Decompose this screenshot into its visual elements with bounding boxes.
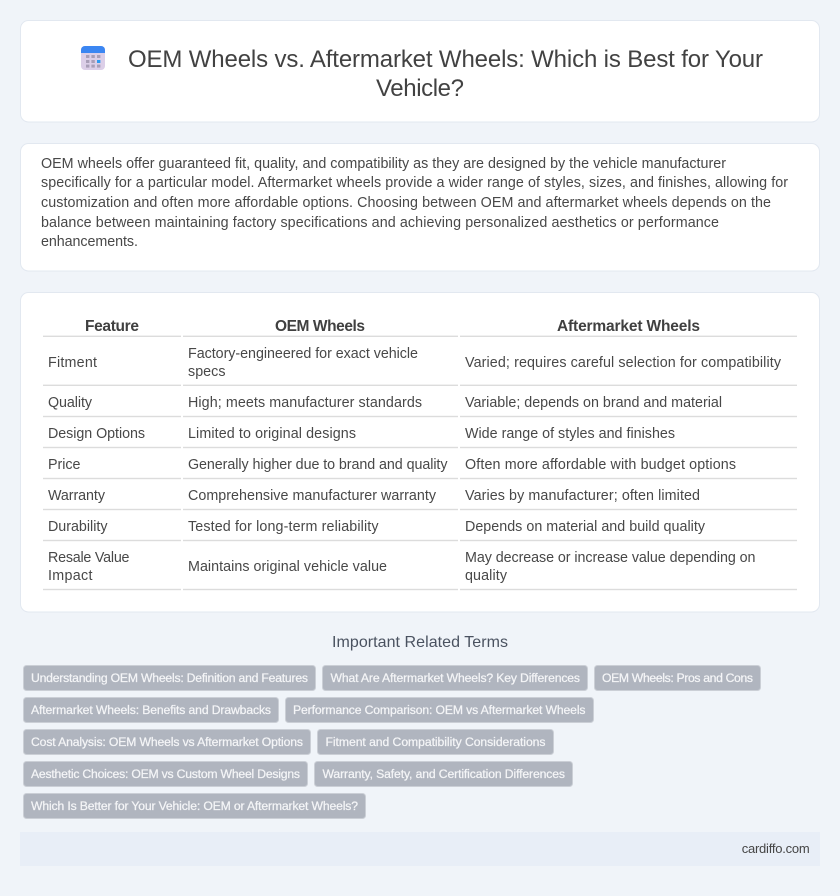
tag: Aesthetic Choices: OEM vs Custom Wheel Designs [31, 767, 300, 781]
tag [322, 666, 588, 690]
row: price: Price [48, 457, 81, 473]
row: warranty: Varies by manufacturer; often limited [465, 488, 700, 504]
row: durability: Depends on material and build quality [465, 519, 706, 535]
panel: introduction text: customization and often more affordable options. Choosing between OEM and aftermarket wheels depends on the [41, 195, 771, 211]
row: fitment: Factory-engineered for exact vehicle [188, 346, 418, 362]
row: design options [48, 426, 675, 442]
row: price: Generally higher due to brand and quality [188, 457, 448, 473]
row: design options: Limited to original designs [188, 426, 356, 442]
related terms tags [24, 666, 760, 818]
tag [314, 762, 572, 786]
tag: Performance Comparison: OEM vs Aftermarket Wheels [293, 703, 586, 717]
table header row: Feature [85, 318, 139, 335]
row: resale value impact: Impact [48, 568, 93, 584]
tag [594, 666, 760, 690]
panel: introduction text: specifically for a particular model. Aftermarket wheels provide a wider range of styles, sizes, and finishes, allowing for [41, 175, 788, 191]
table header row: Aftermarket Wheels [557, 318, 700, 335]
table header row: OEM Wheels [275, 318, 365, 335]
row: price [48, 457, 736, 473]
tag [318, 730, 554, 754]
row: fitment: Fitment [48, 355, 97, 371]
row: warranty [48, 488, 700, 504]
tag [24, 698, 278, 722]
tag [24, 666, 316, 690]
tag [286, 698, 594, 722]
panel: header [20, 20, 820, 122]
tag [24, 730, 310, 754]
row: durability: Durability [48, 519, 108, 535]
row: resale value impact: quality [465, 568, 508, 584]
icon: calendar [81, 46, 105, 70]
table header row [85, 318, 700, 335]
row: resale value impact: May decrease or increase value depending on [465, 550, 756, 566]
row: quality: Quality [48, 395, 93, 411]
title [128, 46, 763, 102]
tag: Understanding OEM Wheels: Definition and Features [31, 671, 308, 685]
row: quality: High; meets manufacturer standards [188, 395, 422, 411]
row: design options: Design Options [48, 426, 145, 442]
row: durability [48, 519, 706, 535]
tag [24, 762, 308, 786]
tag: Aftermarket Wheels: Benefits and Drawbacks [31, 703, 271, 717]
row: resale value impact: Resale Value [48, 550, 130, 566]
row: warranty: Comprehensive manufacturer warranty [188, 488, 437, 504]
row: durability: Tested for long-term reliability [188, 519, 379, 535]
panel: introduction text: OEM wheels offer guaranteed fit, quality, and compatibility as they are designed by the vehicle manufacturer [41, 156, 726, 172]
row: price: Often more affordable with budget options [465, 457, 736, 473]
tag: What Are Aftermarket Wheels? Key Differences [330, 671, 580, 685]
tag: OEM Wheels: Pros and Cons [602, 671, 753, 685]
tag: Cost Analysis: OEM Wheels vs Aftermarket Options [31, 735, 303, 749]
title: OEM Wheels vs. Aftermarket Wheels: Which is Best for Your [128, 46, 763, 73]
row: resale value impact: Maintains original vehicle value [188, 559, 387, 575]
footer [20, 832, 820, 866]
row: fitment: specs [188, 364, 226, 380]
row: quality: Variable; depends on brand and material [465, 395, 722, 411]
row: fitment: Varied; requires careful selection for compatibility [465, 355, 782, 371]
panel: introduction text: balance between maintaining factory specifications and achieving personalized aesthetics or performance [41, 215, 719, 231]
row: quality [48, 395, 722, 411]
tag: Warranty, Safety, and Certification Differences [322, 767, 565, 781]
row: design options: Wide range of styles and finishes [465, 426, 675, 442]
row: warranty: Warranty [48, 488, 106, 504]
tag: Which Is Better for Your Vehicle: OEM or Aftermarket Wheels? [31, 799, 358, 813]
panel: comparison table [20, 292, 820, 612]
tag [24, 794, 366, 818]
title: Vehicle? [376, 75, 464, 102]
panel: introduction text: enhancements. [41, 234, 138, 250]
footer: cardiffo.com [742, 841, 810, 856]
row: resale value impact [48, 550, 756, 584]
heading: important related terms: Important Related Terms [332, 634, 508, 651]
row: fitment [48, 346, 782, 380]
panel: introduction text [20, 144, 820, 271]
tag: Fitment and Compatibility Considerations [326, 735, 546, 749]
